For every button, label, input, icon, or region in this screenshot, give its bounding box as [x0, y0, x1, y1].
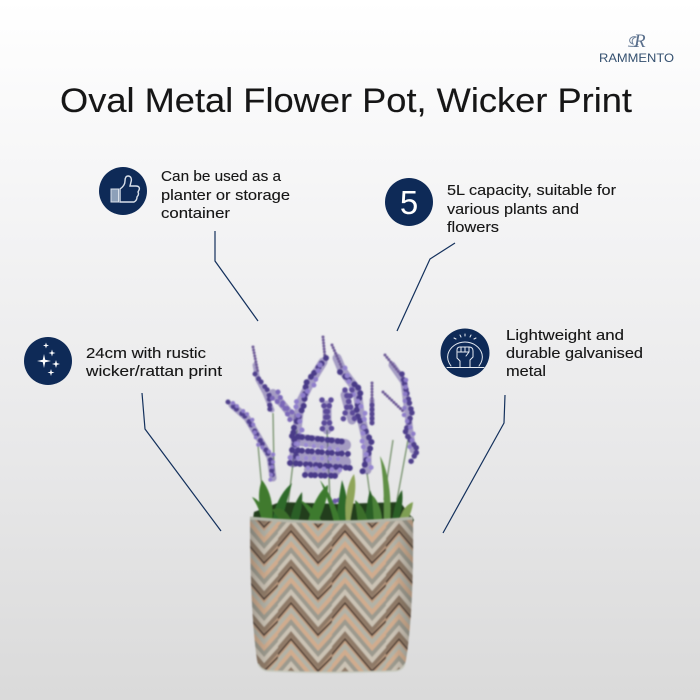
wicker pot: [250, 518, 413, 672]
pot rim: [250, 518, 413, 522]
pot shading: [250, 518, 413, 672]
text: planter or storage: planter or storage: [161, 188, 290, 204]
text: size and print: [85, 346, 222, 380]
logo: Rammento: R: [633, 31, 646, 52]
pot body: [250, 518, 413, 672]
leader line: size: [142, 393, 221, 531]
pot base edge: [258, 664, 405, 672]
callout: planter or storage: [99, 167, 290, 222]
logo: Rammento: RAMMENTO: [599, 51, 674, 65]
callout: size and print: [24, 337, 222, 385]
leader line: durable: [443, 395, 505, 533]
text: capacity: 5L capacity, suitable for: [447, 183, 616, 199]
text: capacity: flowers: [447, 220, 499, 236]
icon: number 5: 5: [400, 184, 418, 221]
leader line: planter: [215, 231, 258, 321]
text: size and print: 24cm with rustic: [86, 346, 206, 362]
text: size and print: wicker/rattan print: [85, 364, 222, 380]
text: planter or storage: container: [161, 206, 230, 222]
icon: sparkles: [24, 337, 72, 385]
icon: raised fist: [440, 328, 490, 378]
text: durable metal: [506, 328, 643, 380]
title: Oval Metal Flower Pot, Wicker Print: [60, 82, 633, 120]
lavender spike bodies: [232, 358, 413, 478]
leaves: [252, 456, 414, 526]
text: durable metal: Lightweight and: [506, 328, 624, 344]
text: durable metal: metal: [506, 364, 546, 380]
logo: Rammento: [599, 31, 674, 65]
text: capacity: various plants and: [447, 202, 579, 218]
text: durable metal: durable galvanised: [506, 346, 643, 362]
leader line: capacity: [397, 243, 455, 331]
text: capacity: [447, 183, 616, 236]
callout: capacity: [385, 178, 616, 236]
lavender plant: [228, 337, 418, 526]
callout: durable metal: [440, 328, 643, 380]
icon: thumbs up: [99, 167, 147, 215]
stems: [258, 413, 408, 510]
icon: number 5: [385, 178, 433, 226]
text: planter or storage: Can be used as a: [161, 169, 282, 185]
lavender florets: [228, 337, 418, 518]
text: planter or storage: [161, 169, 290, 222]
